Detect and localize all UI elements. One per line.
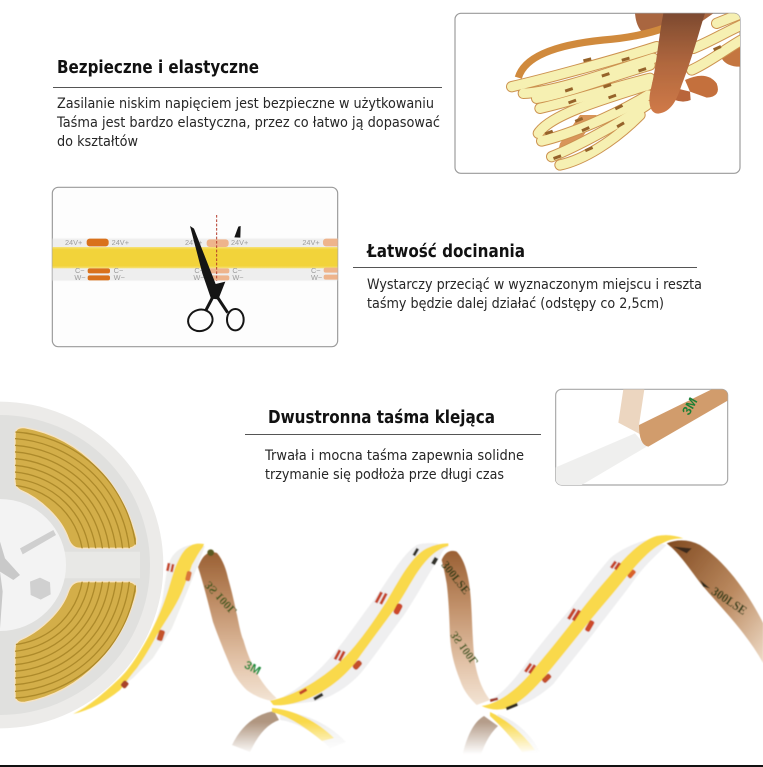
strip pad labels: 24V+ [112, 238, 129, 247]
LED ribbon: tan adhesive backings and centre section [198, 543, 490, 705]
adhesive label text: 300LSE [439, 559, 473, 597]
adhesive label text [202, 559, 481, 668]
icon: scissors [186, 226, 244, 334]
strip pad labels: 24V+ [185, 238, 202, 247]
strip pad labels: W− [311, 273, 322, 282]
strip pad labels: 24V+ [302, 238, 320, 247]
LED ribbon: third wave [482, 535, 763, 710]
reel of LED strip [0, 402, 163, 728]
strip pad labels: C− [232, 266, 242, 275]
LED ribbon: tan adhesive backings and centre section: 3M [242, 658, 263, 678]
strip pad labels: 24V+ [231, 238, 248, 247]
heading: easy cutting: Łatwość docinania [366, 242, 525, 262]
strip pad labels: C− [194, 266, 204, 275]
text block: safe and flexible: Zasilanie niskim napięciem jest bezpieczne w użytkowaniu [57, 96, 434, 112]
reel window: bottom winding [14, 581, 138, 703]
strip pad labels: C− [114, 266, 123, 275]
backing arc [518, 28, 663, 78]
strip solder pads [87, 239, 346, 280]
strip pad labels: 24V+ [65, 238, 82, 247]
text block: double-sided tape: trzymanie się podłoża prze długi czas [265, 467, 504, 483]
strip pad labels: W− [232, 273, 244, 282]
reel window: top winding [14, 427, 138, 549]
adhesive label text: 3S 100L [202, 579, 240, 617]
hand behind strips [635, 13, 740, 102]
adhesive label text: 3S 100L [448, 629, 481, 668]
strip pad labels: C− [75, 266, 85, 275]
text block: double-sided tape: Trwała i mocna taśma zapewnia solidne [264, 448, 524, 464]
strip pad labels: W− [193, 273, 205, 282]
panel: adhesive tape photo [556, 389, 728, 486]
heading: safe and flexible: Bezpieczne i elastyczne [57, 58, 259, 78]
text block: easy cutting: Wystarczy przeciąć w wyznaczonym miejscu i reszta [367, 277, 702, 293]
strip pad labels: W− [114, 273, 125, 282]
panel: adhesive tape photo: 3M [679, 395, 700, 417]
strip pad labels: W− [74, 273, 86, 282]
heading: double-sided tape: Dwustronna taśma klejąca [268, 408, 495, 428]
LED ribbon: first wave [73, 535, 763, 714]
strip pad labels [65, 238, 322, 282]
text block: safe and flexible: Taśma jest bardzo elastyczna, przez co łatwo ją dopasować [56, 115, 440, 131]
strip pad labels: C− [311, 266, 321, 275]
text block: easy cutting: taśmy będzie dalej działać (odstępy co 2,5cm) [367, 296, 664, 312]
LED ribbon: third wave: 300LSE [709, 584, 749, 618]
strip pads [545, 45, 722, 160]
panel: cutting strip photo [52, 187, 346, 347]
panel: flexible strip photo [455, 13, 742, 173]
ribbon reflection [215, 708, 555, 765]
icon: finger [649, 13, 705, 114]
text block: safe and flexible: do kształtów [57, 134, 138, 150]
